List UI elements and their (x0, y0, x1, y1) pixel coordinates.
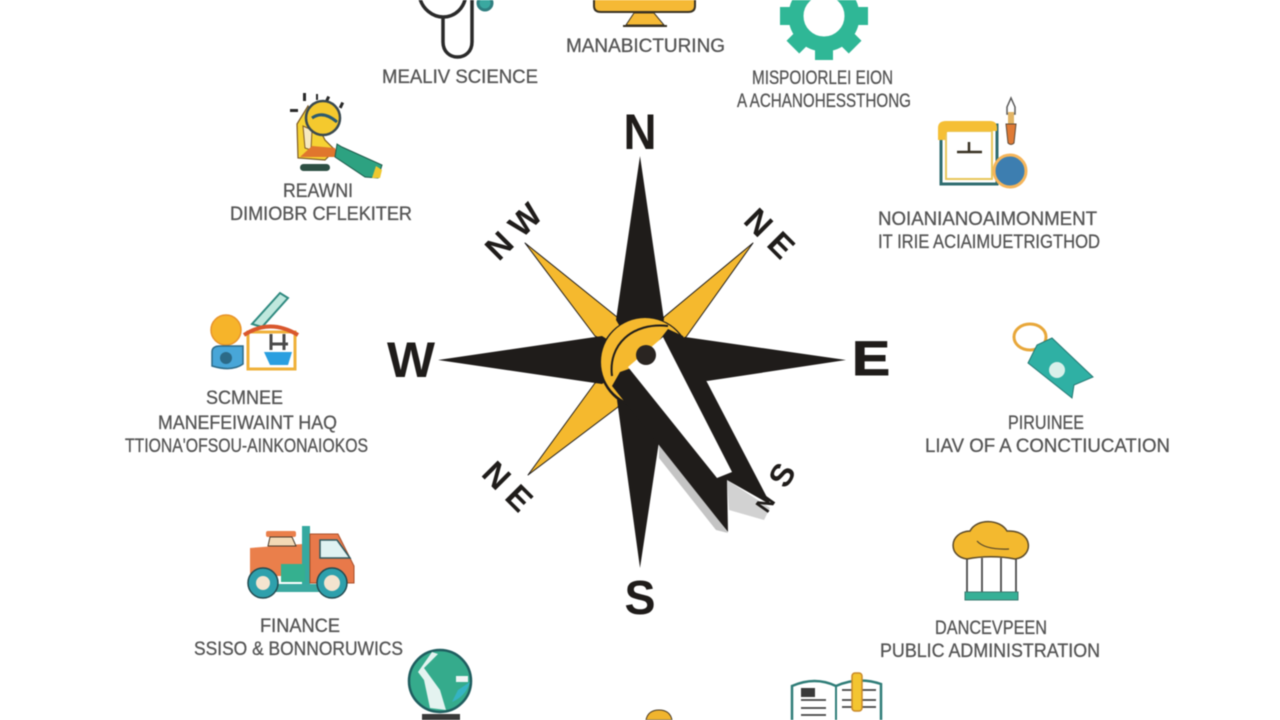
panel: research (230, 93, 412, 225)
compass direction letters (387, 104, 890, 625)
panel: law and construction (925, 324, 1170, 457)
panel: finance and economics (194, 526, 403, 660)
compass hub crescent (599, 317, 691, 409)
compass direction letters: N E (475, 454, 540, 519)
icon: monitor (594, 0, 695, 27)
label: SCMNEE (206, 387, 283, 409)
label: A ACHANOHESSTHONG (737, 90, 911, 112)
label: DANCEVPEEN (935, 617, 1047, 639)
label (880, 617, 1100, 662)
label (230, 180, 412, 225)
label: MISPOIORLEI EION (752, 67, 893, 89)
label: LIAV OF A CONCTIUCATION (925, 435, 1170, 457)
label: SSISO & BONNORUWICS (194, 638, 403, 660)
icon: scale and globe (938, 98, 1026, 187)
label: IT IRIE ACIAIMUETRIGTHOD (878, 231, 1100, 253)
panel: compass rose (387, 104, 890, 625)
panel: mechanical engineering (737, 0, 911, 112)
label (125, 387, 368, 457)
label (194, 615, 403, 660)
label: NOIANIANOAIMONMENT (878, 208, 1097, 230)
label: MANABICTURING (566, 35, 725, 57)
compass direction letters: N (624, 104, 656, 160)
panel: science management (125, 293, 368, 457)
compass direction letters: N W (478, 195, 550, 267)
panel: information technology (878, 98, 1100, 253)
label: DIMIOBR CFLEKITER (230, 203, 412, 225)
label: FINANCE (260, 615, 340, 637)
label (737, 67, 911, 112)
cardinal black points (438, 156, 846, 568)
icon: chef hat building (953, 522, 1028, 600)
label (878, 208, 1100, 253)
label: MEALIV SCIENCE (382, 66, 538, 88)
label (925, 412, 1170, 457)
compass direction letters: N E (737, 201, 802, 266)
compass direction letters: E (852, 333, 890, 386)
compass direction letters: S (761, 457, 803, 493)
label: REAWNI (283, 180, 353, 202)
icon: stethoscope (419, 0, 492, 57)
icon: globe (409, 650, 471, 720)
icon: price tag (1014, 324, 1093, 398)
panel: manufacturing (566, 0, 725, 57)
label: TTIONA'OFSOU-AINKONAIOKOS (125, 435, 368, 457)
compass direction letters: S (624, 572, 656, 625)
compass needle (612, 329, 771, 532)
compass direction letters: N (751, 490, 780, 517)
needle shadow (659, 436, 770, 533)
icon: magnifier and gavel (290, 93, 382, 178)
label: MANEFEIWAINT HAQ (158, 412, 337, 434)
panel: medical science (382, 0, 538, 88)
panel: public administration (880, 522, 1100, 662)
icon: gear (780, 0, 868, 60)
label: PUBLIC ADMINISTRATION (880, 640, 1100, 662)
label: PIRUINEE (1008, 412, 1084, 434)
icon: worker and house (211, 293, 298, 369)
compass direction letters: W (387, 332, 436, 388)
icon: open book (792, 673, 881, 720)
icon: truck (248, 526, 354, 598)
icon: bulb top (646, 710, 672, 720)
diagonal yellow points (525, 243, 753, 475)
